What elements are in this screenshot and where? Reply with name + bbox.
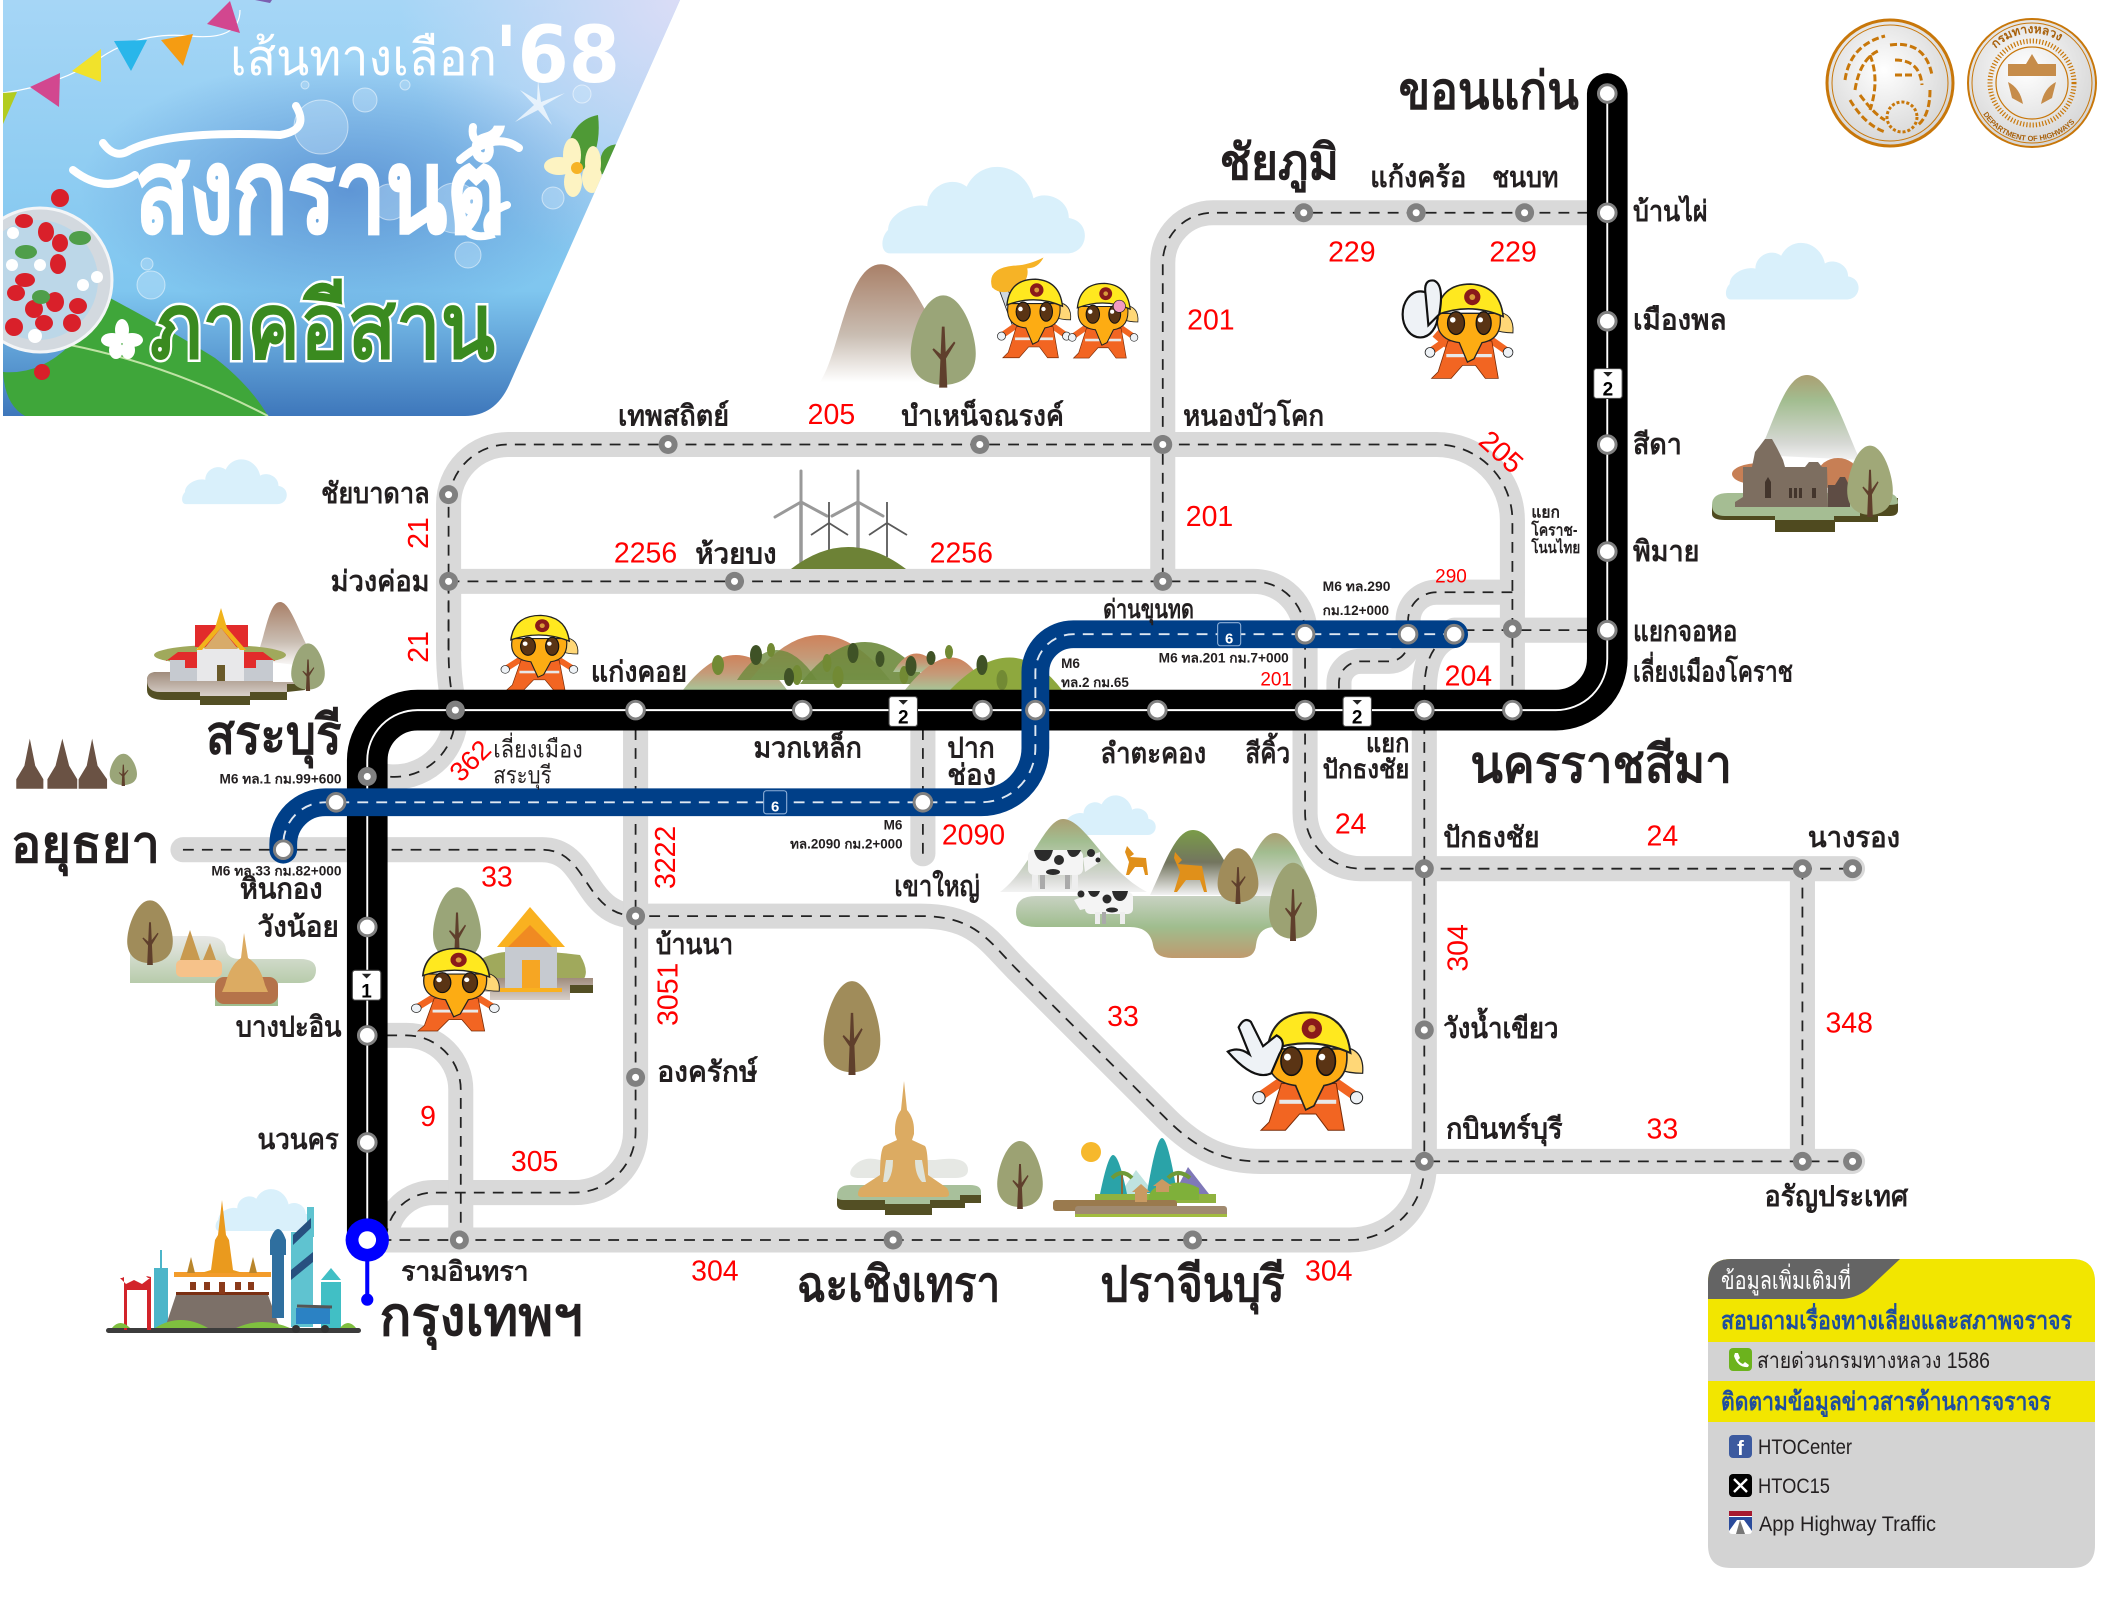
illustration: tree [997, 1141, 1043, 1209]
bunting flags [3, 0, 272, 124]
logo: royal seal [1827, 20, 1953, 146]
label: แยกปักธงชัย: แยก [1366, 730, 1409, 758]
white motorway stations [274, 85, 1616, 1151]
label: วังน้อย: วังน้อย [257, 911, 339, 943]
label: แก่งคอย: แก่งคอย [591, 657, 687, 689]
jasmine flower [101, 319, 143, 359]
label: กบินทร์บุรี: กบินทร์บุรี [1446, 1112, 1563, 1146]
route shield: 2: 2 [1603, 380, 1613, 401]
route shield: 1: 1 [361, 981, 372, 1002]
illustration: mountain with tree [820, 264, 976, 388]
facebook name: HTOCenter [1758, 1436, 1852, 1459]
illustration: tree centre [824, 981, 880, 1075]
label: M6 ทล.290: M6 ทล.290 [1323, 579, 1390, 594]
illustration: wind turbines [775, 471, 907, 563]
illustration: Ayutthaya Buddha scene [127, 900, 316, 1006]
label: ม่วงค่อม: ม่วงค่อม [331, 566, 430, 598]
road number 33: 33 [1107, 1001, 1139, 1033]
illustration: hills band [683, 635, 1062, 690]
road number 362: 362 [443, 734, 497, 788]
frangipani flower with leaves [544, 115, 616, 197]
label: หินกอง: หินกอง [240, 873, 323, 905]
road number 304: 304 [1305, 1256, 1353, 1288]
water bowl [0, 208, 112, 352]
label: แยกโคราช-โนนไทย: แยก [1531, 504, 1560, 522]
label: เขาใหญ่: เขาใหญ่ [894, 869, 980, 903]
label: เลี่ยงเมืองสระบุรี [493, 733, 583, 790]
label: ปักธงชัย: ปักธงชัย [1443, 822, 1540, 854]
illustration: island scene [1053, 1138, 1227, 1217]
icon: facebook [1729, 1435, 1752, 1460]
panel heading: ข้อมูลเพิ่มเติมที่ [1721, 1263, 1851, 1296]
map labels [11, 61, 1909, 1351]
label: M6 ทล.2 กม.65: M6 [1061, 656, 1080, 671]
route shield: 2: 2 [1352, 708, 1363, 729]
illustration: Saraburi temple [147, 602, 325, 705]
illustration: green hill [791, 547, 906, 569]
road number 201: 201 [1187, 304, 1235, 336]
label: อยุธยา: อยุธยา [11, 815, 160, 877]
logo: Department of Highways: กรมทางหลวง [1992, 26, 2062, 48]
label: M6 ทล.201 กม.7+000: M6 ทล.201 กม.7+000 [1159, 651, 1289, 666]
label: นางรอง: นางรอง [1808, 822, 1900, 854]
heading: traffic enquiries: สอบถามเรื่องทางเลี่ยงและสภาพจราจร [1721, 1303, 2072, 1335]
label: แยกโคราช-โนนไทย [1531, 504, 1580, 557]
label: แยกปักธงชัย: ปักธงชัย [1323, 756, 1409, 784]
route shield: 2 [1343, 697, 1371, 729]
label: กม.12+000: กม.12+000 [1323, 603, 1389, 618]
label: M6 ทล.2090 กม.2+000: ทล.2090 กม.2+000 [790, 836, 903, 851]
mascot: praying [411, 949, 499, 1031]
illustration: golden Buddha [837, 1081, 981, 1215]
label: สีดา: สีดา [1633, 429, 1682, 461]
stations [274, 85, 1862, 1306]
route shield: 2 [1594, 369, 1622, 401]
icon: facebook: f [1737, 1438, 1744, 1460]
label: หนองบัวโคก: หนองบัวโคก [1183, 399, 1324, 433]
label: ชัยภูมิ: ชัยภูมิ [1220, 136, 1339, 193]
label: บำเหน็จณรงค์: บำเหน็จณรงค์ [901, 398, 1064, 433]
label: แก้งคร้อ: แก้งคร้อ [1370, 162, 1466, 194]
label: บางปะอิน: บางปะอิน [236, 1012, 342, 1044]
label: M6 ทล.1 กม.99+600: M6 ทล.1 กม.99+600 [220, 771, 342, 786]
terminal: Ram Inthra [346, 1218, 389, 1306]
road number 9: 9 [420, 1101, 436, 1133]
road number 304: 304 [691, 1256, 739, 1288]
illustrations drawn in map units [16, 167, 1859, 1130]
logo: Department of Highways [1967, 18, 2097, 148]
panel: header banner [0, 0, 683, 420]
label: ฉะเชิงเทรา: ฉะเชิงเทรา [797, 1258, 1000, 1312]
road number 3051: 3051 [653, 963, 685, 1026]
route shield: 1 [352, 970, 381, 1002]
label: ด่านขุนทด: ด่านขุนทด [1103, 596, 1194, 626]
label: ลำตะคอง: ลำตะคอง [1100, 738, 1206, 770]
road number 3222: 3222 [650, 826, 682, 889]
label: ปราจีนบุรี: ปราจีนบุรี [1100, 1258, 1285, 1315]
label: เลี่ยงเมืองสระบุรี: เลี่ยงเมือง [493, 733, 583, 764]
route shield: 6: 6 [1225, 632, 1233, 648]
label: เลี่ยงเมืองสระบุรี: สระบุรี [493, 762, 552, 790]
road number 21: 21 [403, 517, 435, 549]
illustration: Thai temple [477, 907, 593, 1000]
motorway 6: blue line [283, 634, 1454, 850]
route shield: 6 [764, 791, 787, 816]
title: สงกรานต์: สงกรานต์ [135, 126, 505, 258]
mascot: pointing [1228, 1012, 1363, 1130]
road number 24: 24 [1647, 821, 1678, 853]
label: M6 ทล.2090 กม.2+000 [790, 817, 903, 851]
label: อรัญประเทศ: อรัญประเทศ [1764, 1181, 1909, 1213]
label: องครักษ์: องครักษ์ [657, 1055, 758, 1088]
road number 2090: 2090 [942, 819, 1005, 851]
road number 201: 201 [1186, 501, 1233, 533]
road number 348: 348 [1825, 1008, 1873, 1040]
illustration: wildlife hills with cows and deer [1000, 795, 1317, 958]
motorway 1 and 2: black main line [367, 94, 1607, 1240]
label: M6 ทล.33 กม.82+000: M6 ทล.33 กม.82+000 [211, 863, 342, 878]
panel: more information [1708, 1259, 2095, 1568]
road number 33: 33 [1647, 1113, 1678, 1145]
logo: Department of Highways: DEPARTMENT OF HIGHWAYS [1983, 112, 2074, 141]
illustration: tree at Wang Noi [433, 887, 481, 962]
label: แยกปักธงชัย [1323, 730, 1409, 784]
road number 305: 305 [511, 1146, 558, 1178]
illustration: Khmer ruin [1712, 375, 1898, 532]
label: สระบุรี: สระบุรี [206, 705, 342, 769]
label: บ้านนา: บ้านนา [656, 929, 733, 961]
label: เลี่ยงเมืองโคราช: เลี่ยงเมืองโคราช [1633, 652, 1793, 689]
label: พิมาย: พิมาย [1633, 536, 1699, 568]
icon: cloud right [1726, 243, 1859, 299]
label: นวนคร: นวนคร [257, 1124, 339, 1156]
label: นครราชสีมา: นครราชสีมา [1470, 735, 1732, 793]
label: ปากช่อง: ช่อง [947, 760, 996, 792]
hotline text: สายด่วนกรมทางหลวง 1586 [1757, 1348, 1990, 1373]
mascot: torch bearer [991, 257, 1071, 358]
label: แยกโคราช-โนนไทย: โนนไทย [1531, 537, 1580, 557]
road number 33: 33 [481, 861, 513, 893]
label: แยกโคราช-โนนไทย: โคราช- [1531, 519, 1577, 539]
road number 21: 21 [403, 631, 435, 663]
label: ปากช่อง: ปาก [947, 733, 995, 765]
road number 2256: 2256 [930, 537, 993, 569]
road number 290: 290 [1435, 567, 1467, 588]
route shield: 6 [1218, 623, 1241, 648]
label: ปากช่อง [947, 733, 996, 792]
label: แยกจอหอ: แยกจอหอ [1633, 616, 1737, 648]
title: ภาคอีสาน: ภาคอีสาน [150, 276, 495, 378]
banana leaf [3, 298, 268, 416]
sparkle [515, 80, 565, 125]
icon: X [1729, 1474, 1752, 1497]
route shield: 6: 6 [771, 800, 779, 816]
X name: HTOC15 [1758, 1475, 1830, 1498]
title: เส้นทางเลือก: เส้นทางเลือก [230, 30, 497, 86]
label: M6 ทล.2 กม.65: ทล.2 กม.65 [1061, 675, 1129, 690]
mascot: near Saraburi [501, 615, 578, 690]
route shield: 2 [889, 697, 917, 729]
road number 204: 204 [1445, 661, 1492, 693]
label: วังน้ำเขียว: วังน้ำเขียว [1443, 1007, 1558, 1045]
grey interchange stations [358, 203, 1862, 1249]
title: สงกรานต์ [73, 106, 519, 258]
road number 205: 205 [808, 399, 855, 431]
label: ขอนแก่น: ขอนแก่น [1399, 61, 1579, 119]
illustration: Bangkok skyline [106, 1189, 361, 1333]
road number 205: 205 [1472, 425, 1529, 480]
heading: follow traffic news: ติดตามข้อมูลข่าวสารด้านการจราจร [1721, 1388, 2051, 1418]
illustrations drawn in full-size pixels [106, 375, 1898, 1333]
icon: cloud top centre [882, 167, 1085, 253]
mascot: thumbs up [1403, 280, 1513, 378]
label: M6 ทล.2 กม.65 [1061, 656, 1129, 690]
label: รามอินทรา: รามอินทรา [401, 1256, 529, 1287]
label: M6 ทล.2090 กม.2+000: M6 [884, 817, 903, 832]
banner shading [121, 0, 680, 298]
road network: grey highways [183, 213, 1853, 1240]
road number 229: 229 [1328, 237, 1376, 269]
road number 2256: 2256 [614, 537, 677, 569]
illustration: three pagodas [16, 739, 137, 789]
mascot: with flower [1068, 283, 1138, 358]
label: ชนบท: ชนบท [1492, 162, 1558, 194]
label: สีคิ้ว: สีคิ้ว [1245, 732, 1290, 770]
icon: phone [1729, 1348, 1752, 1371]
title: '68: '68 [495, 11, 620, 101]
label: ชัยบาดาล: ชัยบาดาล [321, 478, 430, 510]
label: มวกเหล็ก: มวกเหล็ก [753, 730, 862, 765]
road number 304: 304 [1443, 924, 1475, 972]
water drops [137, 80, 591, 299]
road number 24: 24 [1335, 808, 1367, 840]
label: บ้านไผ่: บ้านไผ่ [1633, 194, 1708, 228]
road number 229: 229 [1489, 237, 1537, 269]
route shield: 2: 2 [898, 708, 909, 729]
label: เมืองพล: เมืองพล [1633, 304, 1727, 336]
icon: cloud left [182, 459, 287, 504]
app name: App Highway Traffic [1759, 1513, 1936, 1536]
label: เทพสถิตย์: เทพสถิตย์ [618, 400, 729, 433]
icon: highway traffic app [1729, 1511, 1752, 1534]
road number 201: 201 [1260, 670, 1292, 691]
label: ห้วยบง: ห้วยบง [695, 539, 777, 571]
label: กรุงเทพฯ: กรุงเทพฯ [379, 1287, 583, 1351]
red petals on water [34, 189, 69, 380]
